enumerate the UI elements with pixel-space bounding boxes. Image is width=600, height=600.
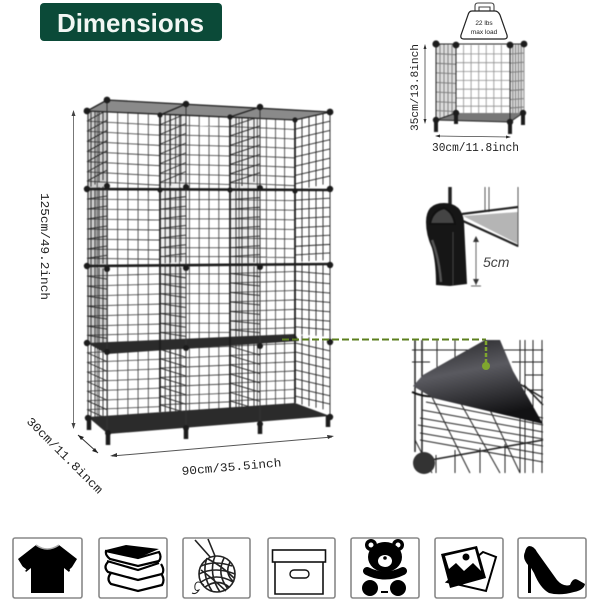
icon row xyxy=(13,538,586,598)
caster ball xyxy=(413,452,435,474)
cube height arrow xyxy=(424,44,426,124)
back wall grids xyxy=(87,111,295,417)
height label: 125cm/49.2inch xyxy=(37,193,51,300)
5cm arrow xyxy=(471,236,481,286)
icon: t-shirt xyxy=(13,538,82,598)
depth label: 30cm/11.8incm xyxy=(23,415,105,497)
depth dimension arrow xyxy=(78,435,98,453)
shelves xyxy=(87,334,299,354)
icon: teddy bear xyxy=(351,538,419,598)
curled black sheet xyxy=(413,340,543,424)
left side shading xyxy=(87,100,107,352)
icon: max load weight xyxy=(461,3,507,39)
icon: max load weight: 22 lbs xyxy=(475,20,493,27)
icon: yarn and needles xyxy=(183,538,250,598)
title badge: Dimensions: Dimensions xyxy=(57,8,204,38)
connector nodes xyxy=(84,97,333,436)
top panel xyxy=(87,100,330,120)
single cube illustration xyxy=(432,40,527,134)
icon: max load weight: max load xyxy=(471,29,498,36)
title badge: Dimensions xyxy=(40,3,222,41)
height dimension arrow xyxy=(72,110,76,429)
detail: foot with 5cm height xyxy=(426,187,518,286)
icon: high heel xyxy=(518,538,586,598)
feet xyxy=(89,416,328,445)
width label: 90cm/35.5inch xyxy=(181,456,282,479)
icon: photos xyxy=(435,538,503,598)
width dimension arrow xyxy=(110,435,334,457)
photo grid lines xyxy=(412,340,543,473)
green dashed callout line xyxy=(282,340,490,370)
cube width label: 30cm/11.8inch xyxy=(432,141,519,155)
icon: books xyxy=(99,538,167,598)
side panel grids xyxy=(87,100,330,426)
detail: corner sheet photo xyxy=(412,340,543,474)
main wire cube shelf illustration xyxy=(84,97,333,445)
cube height label: 35cm/13.8inch xyxy=(410,44,422,131)
5cm label: 5cm xyxy=(483,254,510,270)
cube width arrow xyxy=(435,134,511,138)
frame bars and posts xyxy=(87,189,330,266)
icon: storage box xyxy=(268,538,335,598)
